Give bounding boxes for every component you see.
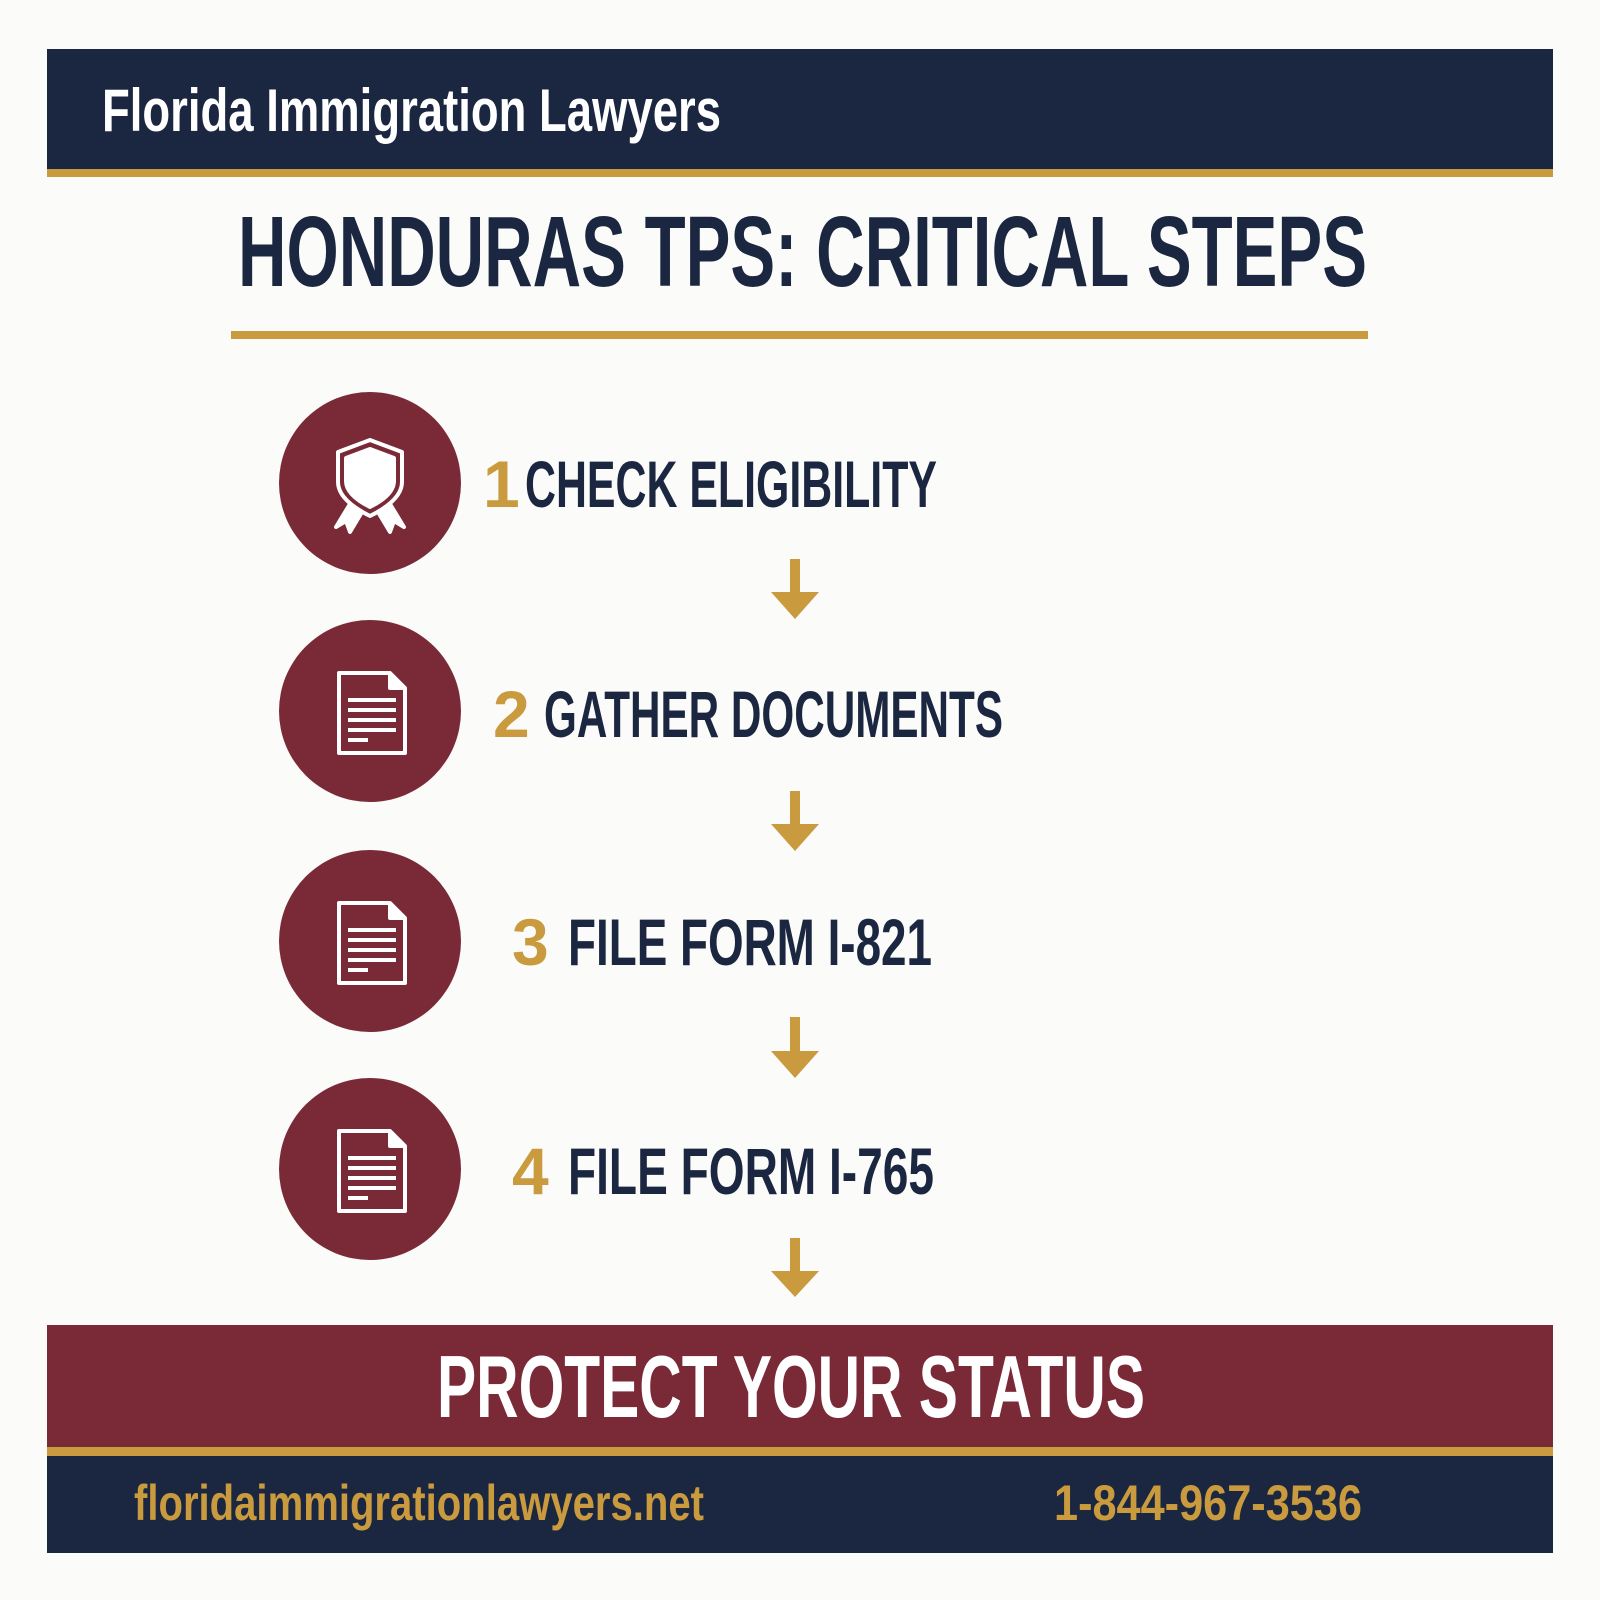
title xyxy=(231,196,1368,339)
footer xyxy=(47,1447,1553,1553)
step 2: 2 xyxy=(493,677,530,751)
step 1 xyxy=(279,392,937,574)
arrow 4 xyxy=(771,1238,819,1297)
phone: 1-844-967-3536 xyxy=(1054,1475,1362,1531)
banner: protect your status: PROTECT YOUR STATUS xyxy=(437,1337,1145,1436)
arrow 1 xyxy=(771,559,819,619)
icon: document xyxy=(339,903,405,983)
icon: shield badge xyxy=(336,440,404,532)
step 3: 3 xyxy=(512,905,549,979)
step 3 xyxy=(279,850,932,1032)
step 1: 1 xyxy=(483,447,520,521)
step 2: GATHER DOCUMENTS xyxy=(544,677,1003,751)
arrow 2 xyxy=(771,791,819,851)
header bar xyxy=(47,49,1553,177)
step 4: 4 xyxy=(512,1134,549,1208)
icon: document xyxy=(339,1131,405,1211)
website: floridaimmigrationlawyers.net xyxy=(134,1475,704,1531)
step 3: FILE FORM I-821 xyxy=(568,905,932,979)
arrow 3 xyxy=(771,1017,819,1078)
step 4: FILE FORM I-765 xyxy=(568,1134,934,1208)
step 2 xyxy=(279,620,1003,802)
icon: document xyxy=(339,673,405,753)
step 4 xyxy=(279,1078,934,1260)
step 1: CHECK ELIGIBILITY xyxy=(525,447,937,521)
header text: Florida Immigration Lawyers xyxy=(102,77,721,144)
banner: protect your status xyxy=(47,1325,1553,1447)
